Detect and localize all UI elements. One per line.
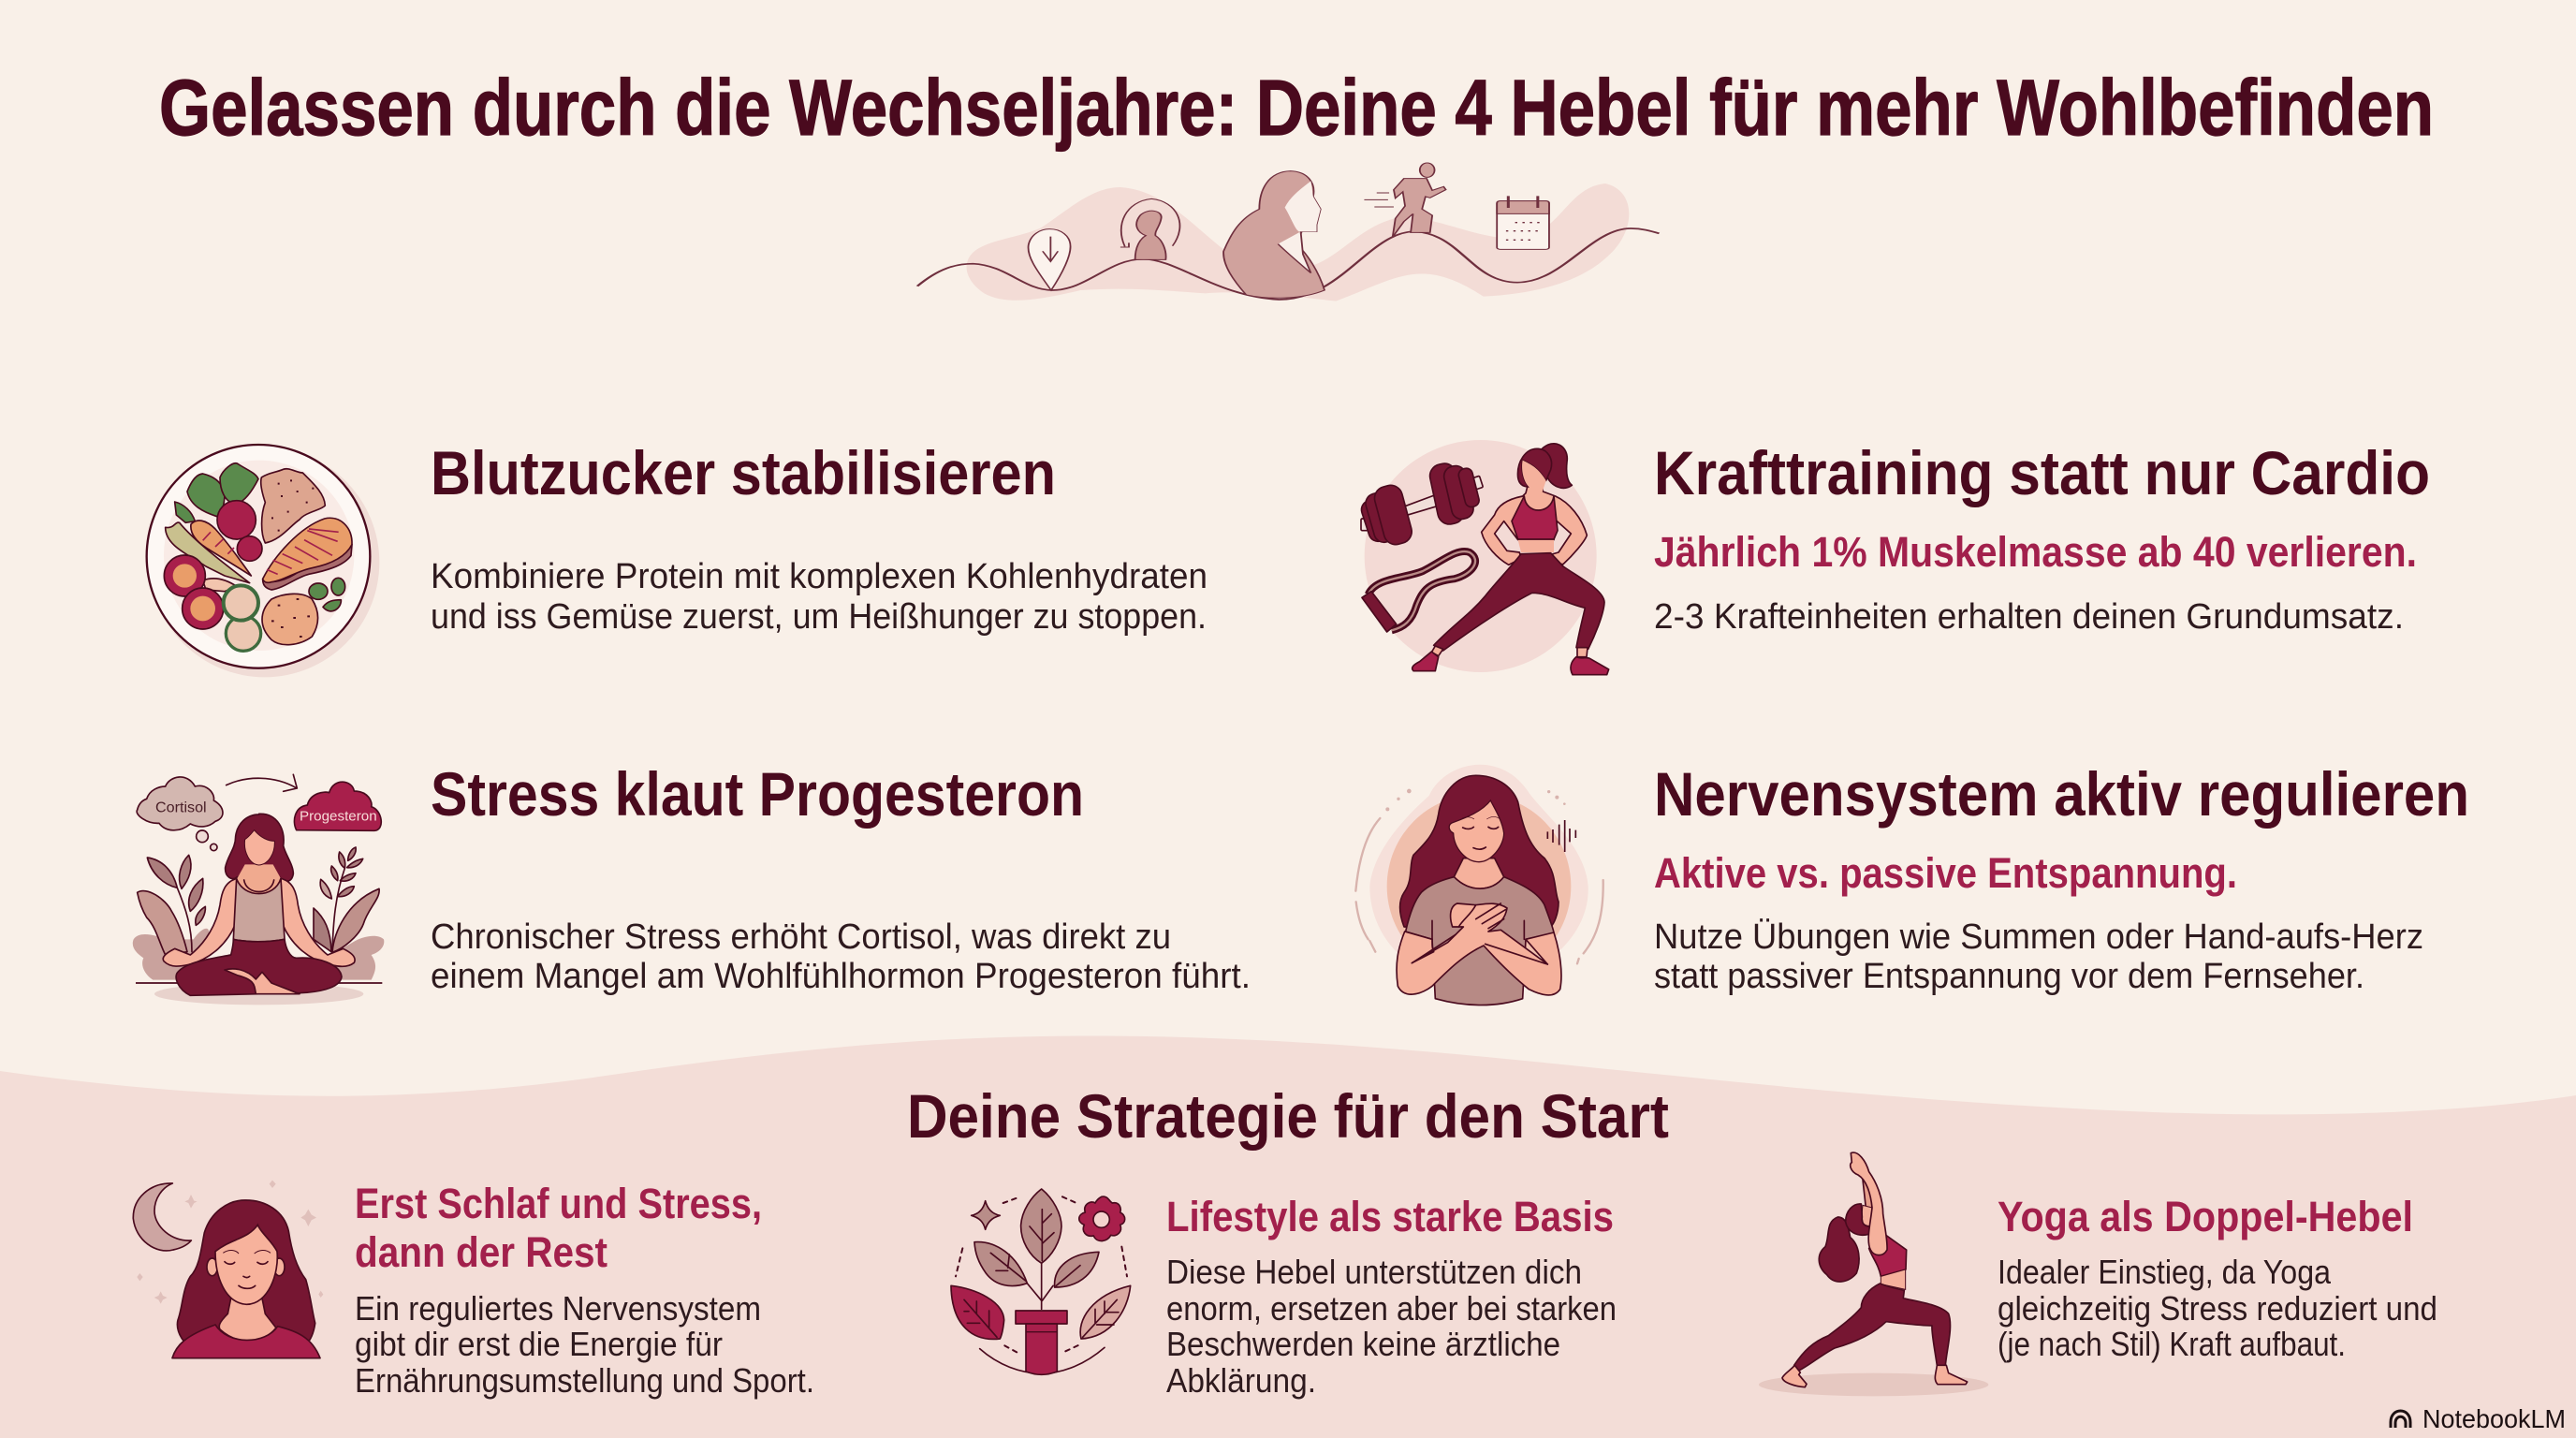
icon: plant with leaves and flower bbox=[951, 1189, 1131, 1374]
body text: statt passiver Entspannung vor dem Fernseher. bbox=[1654, 957, 2364, 996]
body text: Nutze Übungen wie Summen oder Hand-aufs-Herz bbox=[1654, 917, 2423, 957]
card heading: Yoga als Doppel-Hebel bbox=[1998, 1193, 2413, 1240]
background blobs bbox=[967, 183, 1629, 301]
card text: (je nach Stil) Kraft aufbaut. bbox=[1998, 1325, 2346, 1363]
heading: Blutzucker stabilisieren bbox=[431, 438, 1056, 507]
card: Lifestyle als starke Basis bbox=[951, 1189, 1617, 1400]
header illustration: wave with life stage icons bbox=[917, 163, 1659, 301]
panel: Nervensystem aktiv regulieren bbox=[1355, 759, 2469, 1005]
card text: enorm, ersetzen aber bei starken bbox=[1166, 1289, 1617, 1328]
icon: sleeping woman with moon bbox=[133, 1181, 323, 1358]
card text: Ein reguliertes Nervensystem bbox=[355, 1289, 761, 1328]
card text bbox=[1166, 1253, 1617, 1400]
heading: Stress klaut Progesteron bbox=[431, 759, 1084, 829]
bottom strategy band bbox=[0, 1035, 2576, 1438]
body text bbox=[431, 557, 1208, 637]
woman bbox=[226, 814, 293, 881]
body text: einem Mangel am Wohlfühlhormon Progesteron führt. bbox=[431, 957, 1251, 996]
body text: Chronischer Stress erhöht Cortisol, was direkt zu bbox=[431, 917, 1171, 957]
body text: 2-3 Krafteinheiten erhalten deinen Grundumsatz. bbox=[1654, 597, 2404, 637]
card text: gibt dir erst die Energie für bbox=[355, 1325, 723, 1363]
heading: Nervensystem aktiv regulieren bbox=[1654, 759, 2469, 829]
icon: calendar bbox=[1497, 196, 1549, 249]
subheading: Jährlich 1% Muskelmasse ab 40 verlieren. bbox=[1654, 528, 2417, 576]
panel: Blutzucker stabilisieren bbox=[147, 438, 1208, 677]
cloud: Progesteron: Progesteron bbox=[300, 810, 377, 825]
card text: Diese Hebel unterstützen dich bbox=[1166, 1253, 1582, 1291]
card heading bbox=[355, 1180, 762, 1276]
card text: Beschwerden keine ärztliche bbox=[1166, 1325, 1560, 1363]
card heading: Erst Schlaf und Stress, bbox=[355, 1180, 762, 1227]
icon: location pin with arrow bbox=[1029, 229, 1071, 290]
card text bbox=[1998, 1253, 2437, 1363]
icon: woman profile bbox=[1223, 171, 1325, 298]
card text: Abklärung. bbox=[1166, 1361, 1316, 1400]
icon: runner bbox=[1364, 163, 1446, 237]
card text: gleichzeitig Stress reduziert und bbox=[1998, 1289, 2437, 1328]
arrow bbox=[227, 774, 297, 791]
body text bbox=[431, 917, 1251, 996]
panel: Stress klaut Progesteron bbox=[133, 759, 1251, 1005]
panel: Krafttraining statt nur Cardio bbox=[1359, 438, 2430, 675]
cloud: Cortisol: Cortisol bbox=[155, 800, 207, 815]
cloud: Progesteron bbox=[294, 782, 381, 830]
body text: und iss Gemüse zuerst, um Heißhunger zu stoppen. bbox=[431, 597, 1207, 637]
card heading: dann der Rest bbox=[355, 1228, 607, 1276]
icon: meditating woman with hormone clouds bbox=[133, 774, 384, 1005]
icon: woman with hands on heart bbox=[1355, 765, 1603, 1005]
heading: Krafttraining statt nur Cardio bbox=[1654, 438, 2430, 507]
body text bbox=[1654, 917, 2423, 996]
card text: Idealer Einstieg, da Yoga bbox=[1998, 1253, 2332, 1291]
icon: strength training woman bbox=[1359, 440, 1609, 675]
card text bbox=[355, 1289, 814, 1400]
card heading: Lifestyle als starke Basis bbox=[1166, 1193, 1614, 1240]
icon: woman in cycle bbox=[1120, 198, 1179, 259]
cloud: Cortisol bbox=[137, 777, 223, 830]
strategy heading: Deine Strategie für den Start bbox=[907, 1081, 1669, 1151]
card: Yoga als Doppel-Hebel bbox=[1759, 1152, 2437, 1396]
icon: food plate bbox=[147, 445, 379, 677]
wave line bbox=[917, 228, 1659, 300]
NotebookLM logo: NotebookLM bbox=[2422, 1404, 2566, 1433]
body text: Kombiniere Protein mit komplexen Kohlenhydraten bbox=[431, 557, 1208, 596]
card text: Ernährungsumstellung und Sport. bbox=[355, 1361, 814, 1400]
subheading: Aktive vs. passive Entspannung. bbox=[1654, 849, 2237, 897]
icon: yoga warrior pose bbox=[1759, 1152, 1988, 1396]
card: Erst Schlaf und Stress bbox=[133, 1180, 814, 1400]
